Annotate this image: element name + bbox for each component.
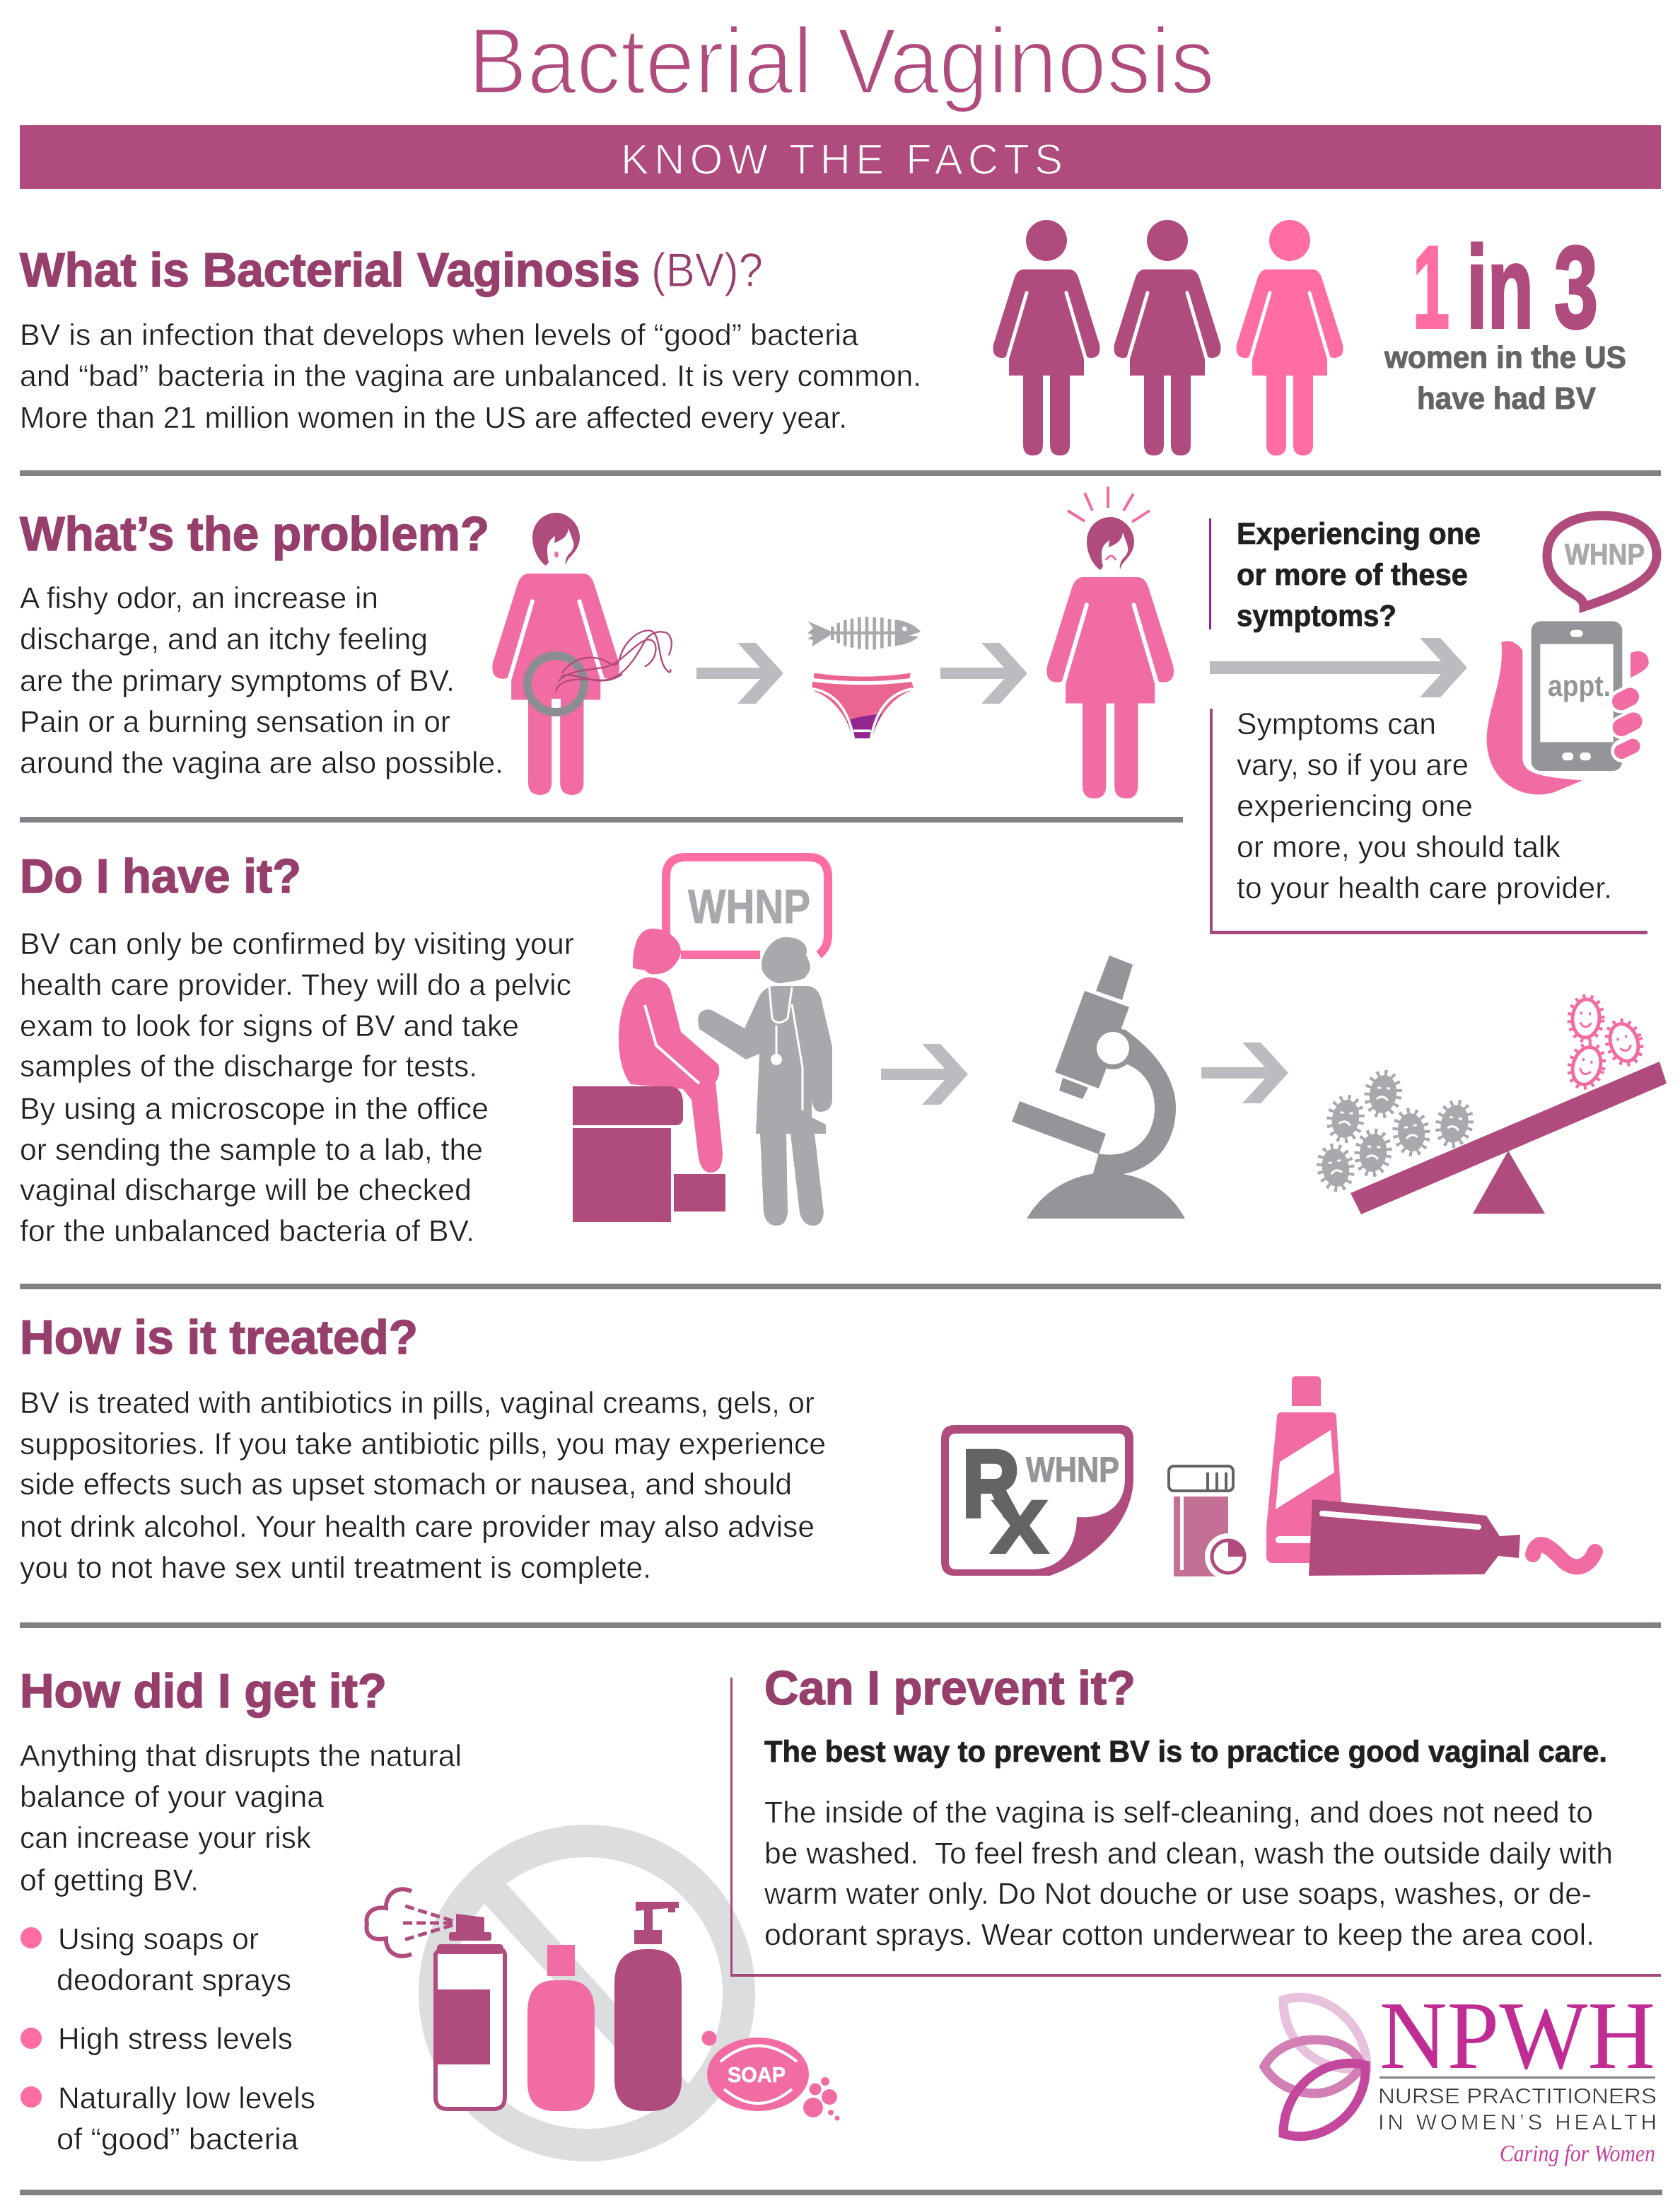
text: prevention advice: The inside of the vagina is self-cleaning, and does not need to bbox=[764, 1796, 1593, 1830]
callout: experiencing symptoms: Symptoms can bbox=[1237, 707, 1436, 741]
text: treatment: you to not have sex until treatment is complete. bbox=[20, 1551, 651, 1585]
text: diagnosis: By using a microscope in the office bbox=[20, 1092, 489, 1126]
arrow bbox=[881, 1044, 968, 1105]
icon: soap: SOAP bbox=[728, 2062, 786, 2087]
text: risk intro: Anything that disrupts the natural bbox=[20, 1739, 462, 1773]
logo: NPWH bbox=[1264, 1982, 1657, 2167]
text: prevention lead: The best way to prevent BV is to practice good vaginal care. bbox=[764, 1735, 1607, 1769]
icon: petals bbox=[1264, 1997, 1367, 2137]
text: diagnosis: BV can only be confirmed by visiting your bbox=[20, 927, 574, 961]
list: risk factors: deodorant sprays bbox=[57, 1963, 291, 1997]
heading: what's the problem: What’s the problem? bbox=[20, 507, 489, 561]
stat: 1 in 3: 1 bbox=[1413, 222, 1449, 352]
icon: speech bubble WHNP bbox=[1547, 516, 1657, 607]
text: prevention advice: warm water only. Do Not douche or use soaps, washes, or de- bbox=[764, 1877, 1592, 1911]
callout: experiencing symptoms: Experiencing one bbox=[1237, 517, 1481, 551]
icon: phone in hand bbox=[1487, 621, 1649, 794]
text: BV definition bbox=[20, 318, 921, 435]
section: do I have it bbox=[20, 849, 1667, 1248]
text: diagnosis: samples of the discharge for tests. bbox=[20, 1050, 477, 1083]
icon: pill bottle bbox=[1169, 1466, 1252, 1580]
icon: prescription pad: R bbox=[962, 1431, 1020, 1537]
logo: NPWH: Caring for Women bbox=[1500, 2141, 1655, 2167]
section: how is it treated bbox=[20, 1311, 1595, 1585]
banner: know the facts: KNOW THE FACTS bbox=[621, 136, 1063, 183]
text: symptoms: are the primary symptoms of BV. bbox=[20, 664, 455, 698]
text: treatment: not drink alcohol. Your health care provider may also advise bbox=[20, 1510, 815, 1544]
icon: lying tube with cream bbox=[1309, 1499, 1595, 1576]
text: risk intro: of getting BV. bbox=[20, 1864, 199, 1898]
icon: patient seated bbox=[573, 929, 725, 1222]
icon: microscope bbox=[1012, 955, 1185, 1219]
callout: experiencing symptoms: vary, so if you are bbox=[1237, 748, 1469, 782]
logo: NPWH: NPWH bbox=[1379, 1982, 1655, 2089]
text: prevention advice: be washed. To feel fresh and clean, wash the outside daily with bbox=[764, 1837, 1613, 1871]
text: prevention advice bbox=[764, 1796, 1613, 1952]
text: treatment: side effects such as upset stomach or nausea, and should bbox=[20, 1468, 792, 1501]
callout: experiencing symptoms: to your health care provider. bbox=[1237, 871, 1612, 905]
text: BV definition: BV is an infection that develops when levels of “good” bacteria bbox=[20, 318, 858, 352]
icon: prohibition sign bbox=[435, 1841, 739, 2145]
heading: treatment: How is it treated? bbox=[20, 1311, 418, 1364]
text: treatment: BV is treated with antibiotics in pills, vaginal creams, gels, or bbox=[20, 1386, 815, 1420]
icon: upright tube bbox=[1266, 1376, 1345, 1563]
text: risk intro: can increase your risk bbox=[20, 1821, 311, 1855]
banner: know the facts bbox=[20, 125, 1661, 189]
callout: experiencing symptoms bbox=[1209, 517, 1647, 934]
icon: doctor bbox=[698, 937, 832, 1226]
list: risk factors: Naturally low levels bbox=[58, 2081, 315, 2115]
logo: NPWH: IN WOMEN’S HEALTH bbox=[1378, 2110, 1657, 2134]
icon: spray can bbox=[366, 1889, 505, 2109]
arrow bbox=[940, 643, 1027, 704]
stat: 1 in 3: in bbox=[1466, 222, 1534, 352]
stat: 1 in 3: have had BV bbox=[1417, 381, 1597, 416]
callout: experiencing symptoms: experiencing one bbox=[1237, 789, 1473, 823]
icon: pink bottle bbox=[527, 1945, 595, 2111]
text: prevention advice: odorant sprays. Wear cotton underwear to keep the area cool. bbox=[764, 1918, 1594, 1952]
icon: underwear bbox=[812, 673, 914, 738]
icon: distressed woman bbox=[1046, 487, 1174, 798]
stat: 1 in 3: 3 bbox=[1554, 222, 1598, 352]
list: risk factors: Using soaps or bbox=[58, 1922, 259, 1956]
text: diagnosis: health care provider. They will do a pelvic bbox=[20, 968, 571, 1002]
text: diagnosis: vaginal discharge will be checked bbox=[20, 1173, 472, 1207]
stat: 1 in 3: women in the US bbox=[1384, 340, 1626, 375]
icon: WHNP office sign: WHNP bbox=[688, 880, 810, 934]
text: symptoms: A fishy odor, an increase in bbox=[20, 581, 378, 615]
icon: WHNP office sign bbox=[666, 857, 828, 955]
text: treatment bbox=[20, 1386, 826, 1585]
text: diagnosis bbox=[20, 927, 574, 1248]
section: what's the problem bbox=[20, 487, 1657, 934]
arrow bbox=[696, 643, 783, 704]
arrow bbox=[1201, 1042, 1288, 1103]
list: risk factors: of “good” bacteria bbox=[57, 2122, 298, 2156]
text: BV definition: More than 21 million women in the US are affected every year. bbox=[20, 401, 847, 435]
heading: prevention: Can I prevent it? bbox=[764, 1661, 1136, 1715]
section: can I prevent it bbox=[730, 1661, 1661, 1977]
text: symptoms: discharge, and an itchy feeling bbox=[20, 622, 428, 656]
icon: prescription pad: X bbox=[991, 1486, 1048, 1569]
icon: prescription pad: WHNP bbox=[1026, 1450, 1119, 1489]
text: risk intro bbox=[20, 1739, 462, 1898]
heading: what is BV: What is Bacterial Vaginosis bbox=[20, 243, 640, 297]
text: symptoms bbox=[20, 581, 503, 780]
text: BV definition: and “bad” bacteria in the vagina are unbalanced. It is very common. bbox=[20, 359, 921, 393]
text: diagnosis: exam to look for signs of BV and take bbox=[20, 1009, 519, 1043]
text: symptoms: around the vagina are also possible. bbox=[20, 746, 503, 780]
text: treatment: suppositories. If you take antibiotic pills, you may experience bbox=[20, 1427, 826, 1461]
icon: soap bbox=[701, 2031, 840, 2120]
heading: do I have it: Do I have it? bbox=[20, 849, 301, 903]
text: diagnosis: for the unbalanced bacteria of BV. bbox=[20, 1214, 474, 1248]
arrow: long bbox=[1210, 638, 1467, 697]
section: how did I get it bbox=[20, 1664, 840, 2156]
stat: 1 in 3 bbox=[1384, 222, 1626, 416]
icon: fish skeleton bbox=[807, 617, 921, 649]
list: risk factors bbox=[21, 1922, 315, 2156]
heading: how did I get it: How did I get it? bbox=[20, 1664, 387, 1718]
callout: experiencing symptoms: or more of these bbox=[1237, 558, 1468, 592]
icon: prescription pad bbox=[941, 1425, 1133, 1576]
title: Bacterial Vaginosis bbox=[468, 9, 1215, 114]
icon: speech bubble WHNP: WHNP bbox=[1565, 538, 1645, 571]
logo: NPWH: NURSE PRACTITIONERS bbox=[1378, 2084, 1657, 2108]
text: risk intro: balance of your vagina bbox=[20, 1780, 324, 1814]
text: diagnosis: or sending the sample to a lab, the bbox=[20, 1133, 483, 1167]
icon: three women bbox=[993, 220, 1343, 455]
text: symptoms: Pain or a burning sensation in or bbox=[20, 705, 450, 739]
callout: experiencing symptoms: or more, you should talk bbox=[1237, 830, 1561, 864]
heading: what is BV: (BV)? bbox=[651, 243, 763, 297]
list: risk factors: High stress levels bbox=[58, 2022, 293, 2056]
icon: phone in hand: appt. bbox=[1548, 669, 1611, 702]
section: what is BV bbox=[20, 220, 1626, 455]
callout: experiencing symptoms: symptoms? bbox=[1237, 599, 1396, 633]
icon: bacteria seesaw bbox=[1317, 995, 1667, 1214]
icon: woman with odor bbox=[492, 513, 672, 795]
icon: pump bottle bbox=[614, 1902, 682, 2111]
